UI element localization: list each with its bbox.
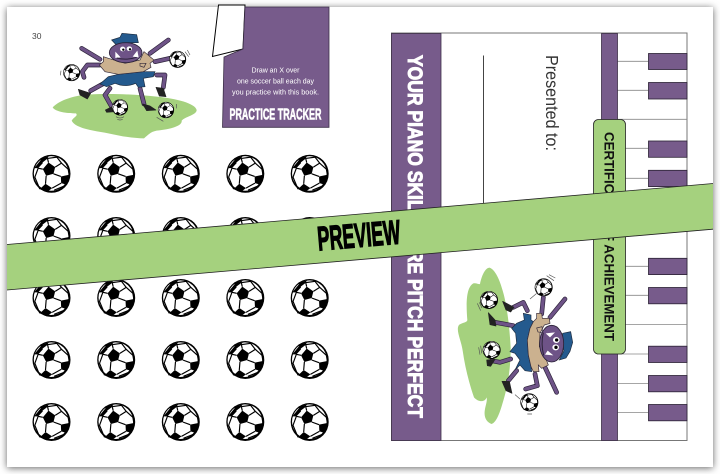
- row 1: [33, 155, 329, 193]
- shirt pendant: [140, 63, 146, 67]
- certificate: [392, 33, 687, 440]
- banner band: [7, 184, 713, 290]
- instructions: one soccer ball each day: [237, 76, 314, 86]
- preview banner: [7, 184, 713, 290]
- certificate spider illustration: [458, 268, 573, 424]
- ball motion marks: [477, 275, 555, 414]
- instructions: Draw an X over: [252, 66, 300, 74]
- spider shorts: [510, 313, 533, 372]
- spider face: [115, 46, 139, 59]
- purple panel: [222, 7, 329, 127]
- purple key strip: [602, 34, 618, 440]
- row 2: [33, 217, 329, 255]
- certificate of achievement tab: CERTIFICATE OF ACHIEVEMENT: [602, 132, 616, 342]
- row 3: [33, 279, 329, 317]
- grass patch: [458, 268, 511, 424]
- certificate frame: [392, 33, 687, 440]
- spider shirt: [99, 52, 154, 74]
- spider shoes: [78, 87, 166, 112]
- practice tracker spider illustration: [53, 33, 197, 138]
- spider cap: [559, 332, 573, 360]
- certificate of achievement tab: [594, 120, 626, 354]
- purple title strip: [392, 34, 441, 440]
- page number: 30: [32, 31, 42, 41]
- spider cap: [112, 33, 138, 45]
- black keys: [648, 54, 687, 421]
- torn paper flag: [212, 5, 245, 56]
- spider shorts: [100, 72, 155, 87]
- preview text: PREVIEW: [316, 213, 402, 258]
- instructions: [232, 66, 319, 96]
- ball motion marks: [60, 50, 190, 121]
- row 5: [33, 403, 329, 441]
- spider head: [540, 325, 564, 362]
- spider shirt: [527, 313, 550, 372]
- panel heading: PRACTICE TRACKER: [230, 106, 322, 123]
- spider head: [109, 43, 142, 63]
- instructions: you practice with this book.: [232, 88, 319, 96]
- spider face: [542, 332, 560, 355]
- spider limbs: [82, 40, 170, 107]
- presented to label: Presented to:: [542, 55, 562, 151]
- spider shoes: [487, 301, 514, 393]
- soccer ball tracker grid: [33, 155, 329, 441]
- practice tracker panel: [212, 5, 329, 127]
- grass patch: [53, 94, 197, 138]
- soccer balls: [480, 278, 553, 411]
- piano key lines: [617, 61, 687, 413]
- spider limbs: [492, 297, 565, 392]
- shirt pendant: [537, 327, 543, 333]
- row 4: [33, 341, 329, 379]
- name line: [482, 56, 484, 215]
- soccer balls at feet: [63, 51, 186, 118]
